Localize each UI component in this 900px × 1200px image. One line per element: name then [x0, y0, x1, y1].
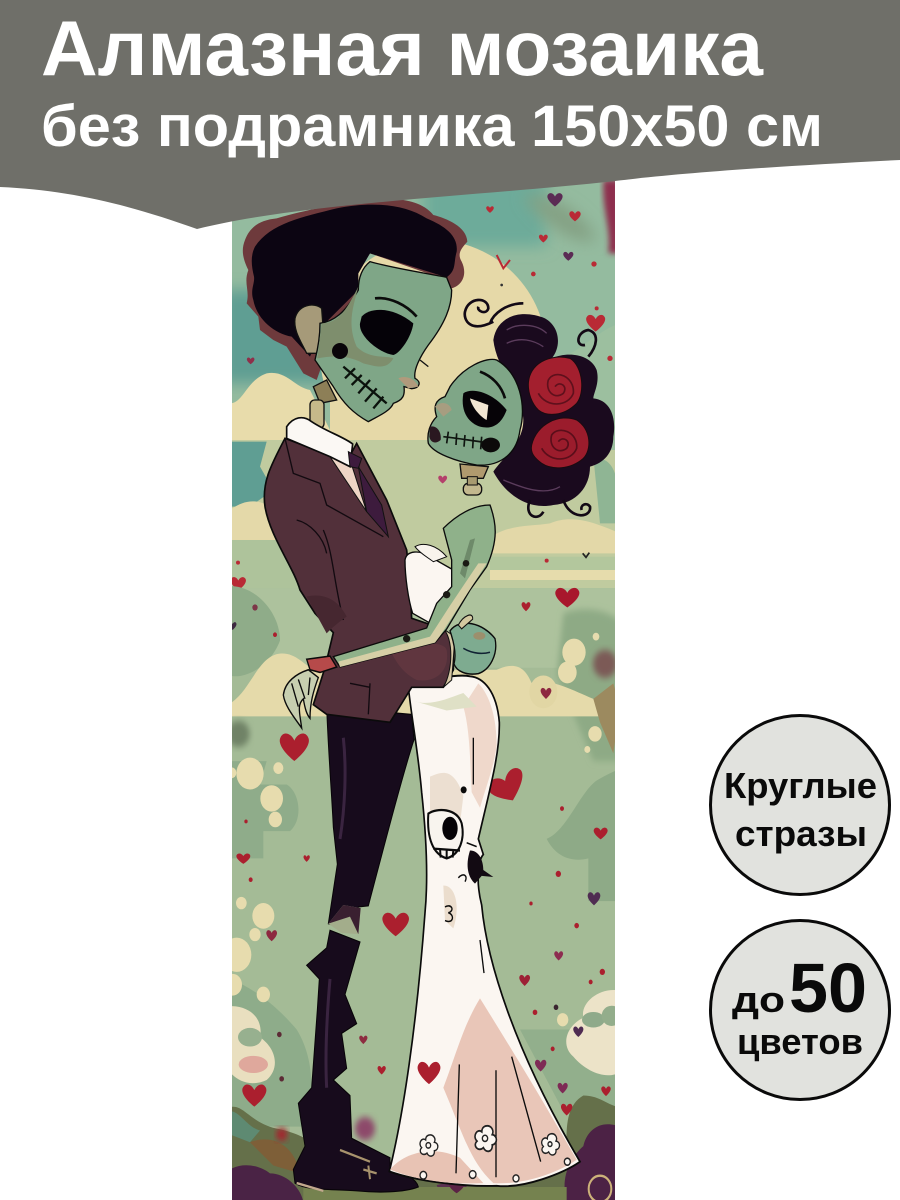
rose upper	[528, 357, 582, 414]
bride curls	[465, 300, 596, 517]
figure: bride neck	[460, 464, 488, 495]
small hearts and specks at top	[231, 193, 613, 591]
badge: up to 50 colours: до	[732, 979, 785, 1020]
figure: groom head	[243, 199, 467, 428]
figure: skeleton hand	[283, 656, 337, 728]
badge: up to 50 colours: 50	[789, 949, 867, 1027]
badge: round rhinestones	[710, 716, 890, 894]
bubbles	[222, 633, 602, 1026]
dress seams and flowers	[445, 738, 541, 1177]
background: sky, moon and clouds	[232, 181, 615, 588]
figure: bride arm	[333, 505, 495, 667]
title line 2: без подрамника 150х50 см	[41, 94, 823, 159]
groom stitches	[343, 367, 387, 408]
hearts on field	[229, 588, 611, 1193]
figure: bride dress	[389, 676, 580, 1186]
bride hair	[493, 314, 614, 506]
badge: round rhinestones: стразы	[735, 813, 867, 854]
badge: round rhinestones: Круглые	[724, 765, 877, 806]
groom ear	[295, 305, 325, 353]
badge: up to 50 colours: цветов	[737, 1021, 863, 1062]
banner: grey heading ribbon	[0, 0, 900, 229]
ground	[230, 1096, 620, 1200]
groom face	[315, 262, 452, 422]
dress skull	[428, 810, 463, 858]
figure: groom suit	[264, 438, 455, 722]
background: lower field, clouds and bubbles	[230, 586, 622, 1200]
figure: bride hair and roses	[465, 300, 614, 517]
title line 1: Алмазная мозаика	[41, 4, 764, 92]
figure: bride head	[428, 359, 522, 465]
badge: up to 50 colours	[710, 920, 890, 1100]
illustration: zombie couple painting	[220, 170, 622, 1200]
figure: bride hand	[450, 615, 496, 674]
groom hair	[243, 199, 467, 380]
rose lower	[531, 418, 589, 468]
foliage blotches	[227, 650, 620, 1140]
dress heart	[418, 1062, 440, 1084]
figure: groom shirt, collar and tie	[287, 418, 388, 537]
groom neck bones	[310, 380, 337, 428]
figure: groom trousers	[293, 707, 418, 1192]
figure: bride bust	[404, 544, 451, 623]
